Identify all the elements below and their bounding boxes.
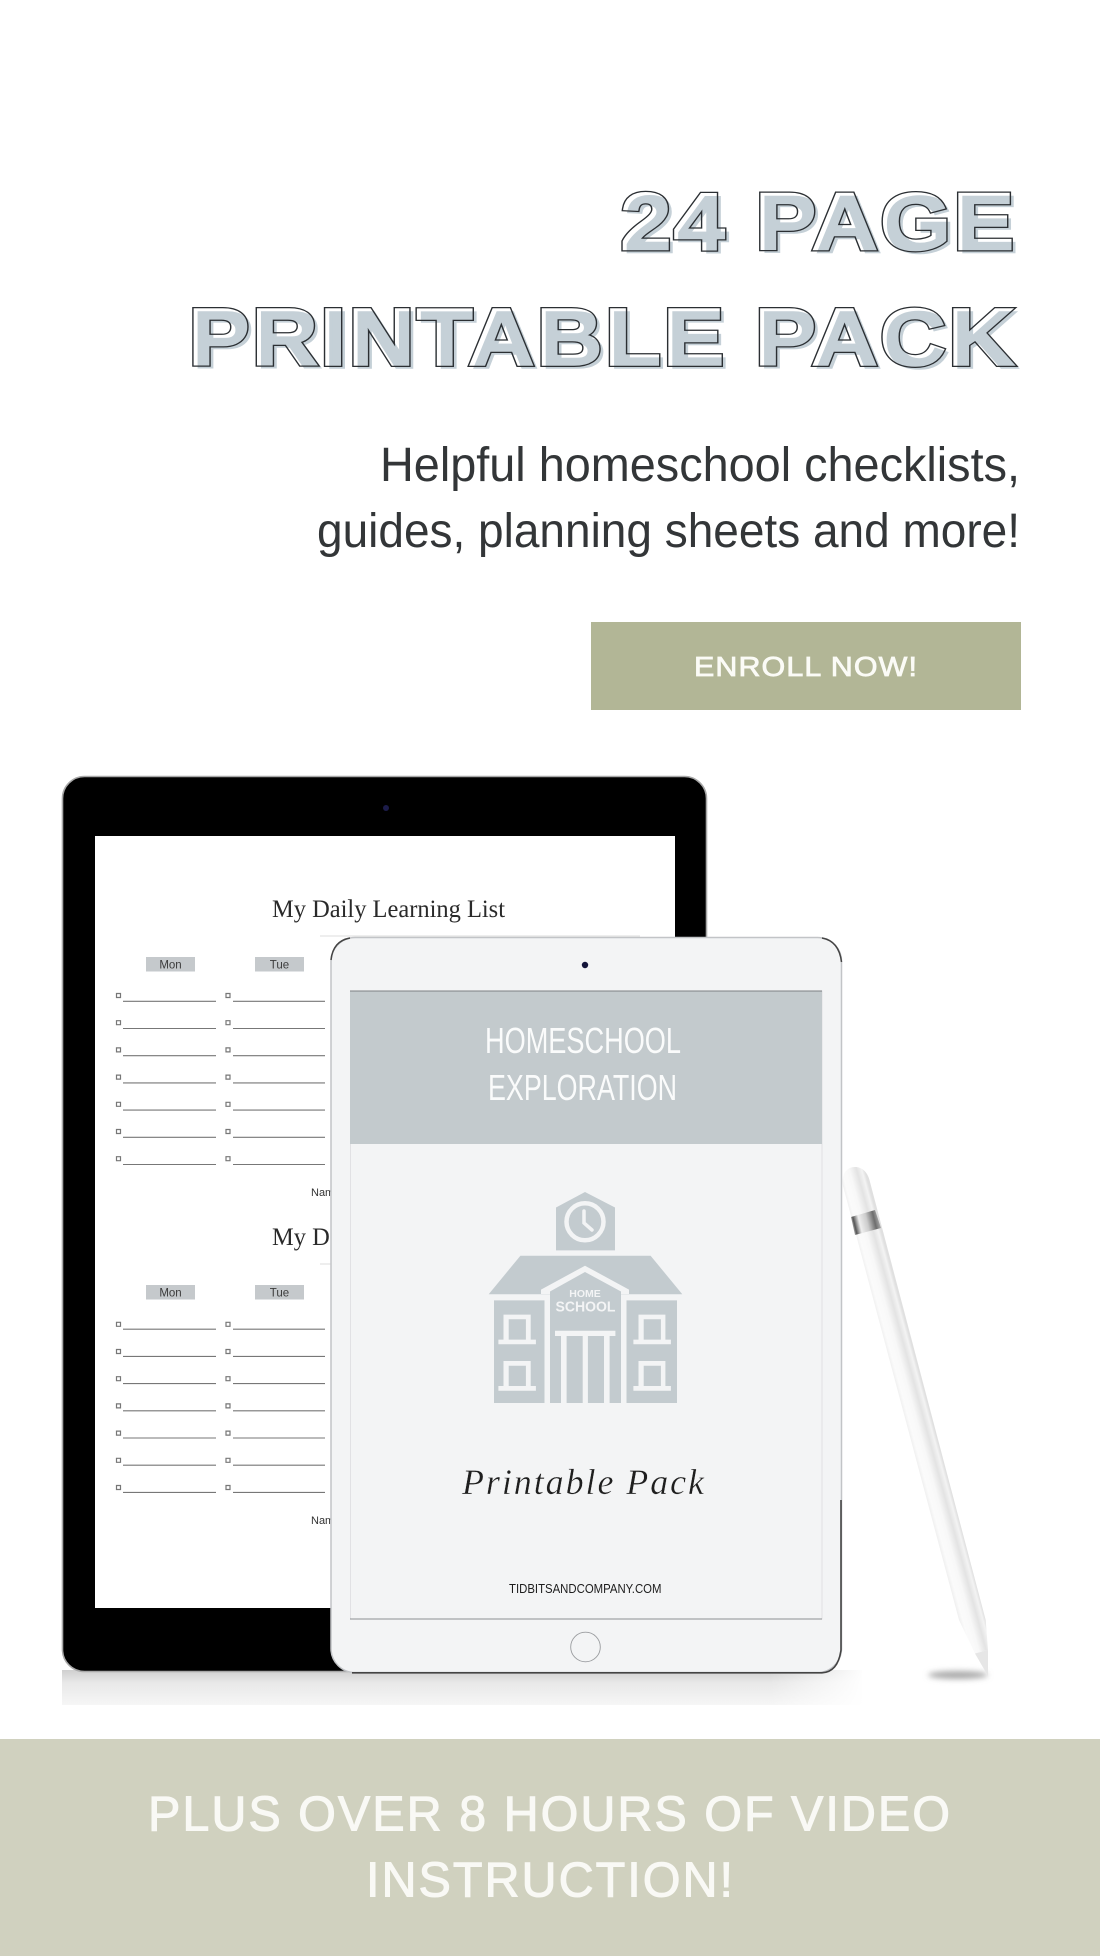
icon: school building <box>489 1192 682 1403</box>
camera <box>383 805 389 811</box>
wings <box>494 1300 677 1403</box>
icon: school building: SCHOOL <box>556 1299 616 1315</box>
title: PRINTABLE PACK <box>193 296 1021 385</box>
subtitle <box>317 439 1020 558</box>
metal band <box>851 1210 881 1235</box>
camera <box>582 962 588 968</box>
button: enroll now: ENROLL NOW! <box>694 651 918 682</box>
back tablet <box>62 776 706 1672</box>
title: PRINTABLE PACK <box>189 293 1017 382</box>
day tags two: Mon <box>159 1288 182 1300</box>
clock tower <box>556 1192 615 1250</box>
roof <box>489 1256 682 1294</box>
day tags two <box>146 1285 304 1300</box>
footer band: PLUS OVER 8 HOURS OF VIDEO <box>148 1788 952 1842</box>
name label one: Name <box>311 1187 340 1199</box>
cover header band: EXPLORATION <box>488 1067 677 1108</box>
title <box>192 190 1020 370</box>
worksheet screen <box>95 836 675 1608</box>
name label two: Name <box>311 1515 340 1527</box>
worksheet heading one: My Daily Learning List <box>272 896 505 923</box>
checklist one <box>116 994 325 1164</box>
stylus <box>843 1167 988 1679</box>
footer band: INSTRUCTION! <box>366 1854 735 1908</box>
day tags one <box>146 957 304 972</box>
worksheet heading two: My Daily Learning List <box>272 1224 505 1251</box>
day tags one: Tue <box>270 960 289 972</box>
tablet body <box>62 776 706 1672</box>
day tags one: Mon <box>159 960 182 972</box>
stylus shadow <box>928 1671 988 1679</box>
home button <box>571 1632 600 1662</box>
stylus body <box>843 1167 988 1654</box>
central entrance <box>541 1266 629 1294</box>
cover header band <box>350 990 822 1144</box>
title: 24 PAGE <box>621 177 1017 266</box>
title: 24 PAGE <box>625 180 1021 269</box>
windows <box>498 1315 671 1391</box>
tablet body <box>331 938 842 1672</box>
subtitle: guides, planning sheets and more! <box>317 505 1020 558</box>
day tags two: Tue <box>270 1288 289 1300</box>
checklist two <box>116 1322 325 1492</box>
cover page <box>350 990 822 1619</box>
sign text: HOME <box>569 1288 601 1300</box>
cover header band: HOMESCHOOL <box>485 1020 681 1061</box>
website: TIDBITSANDCOMPANY.COM <box>509 1582 662 1596</box>
button: enroll now <box>591 622 1021 710</box>
nib <box>975 1650 988 1676</box>
script subtitle: Printable Pack <box>461 1462 705 1502</box>
front tablet <box>331 938 842 1673</box>
footer band <box>0 1739 1100 1956</box>
device shadow <box>62 1668 865 1706</box>
subtitle: Helpful homeschool checklists, <box>380 439 1020 492</box>
